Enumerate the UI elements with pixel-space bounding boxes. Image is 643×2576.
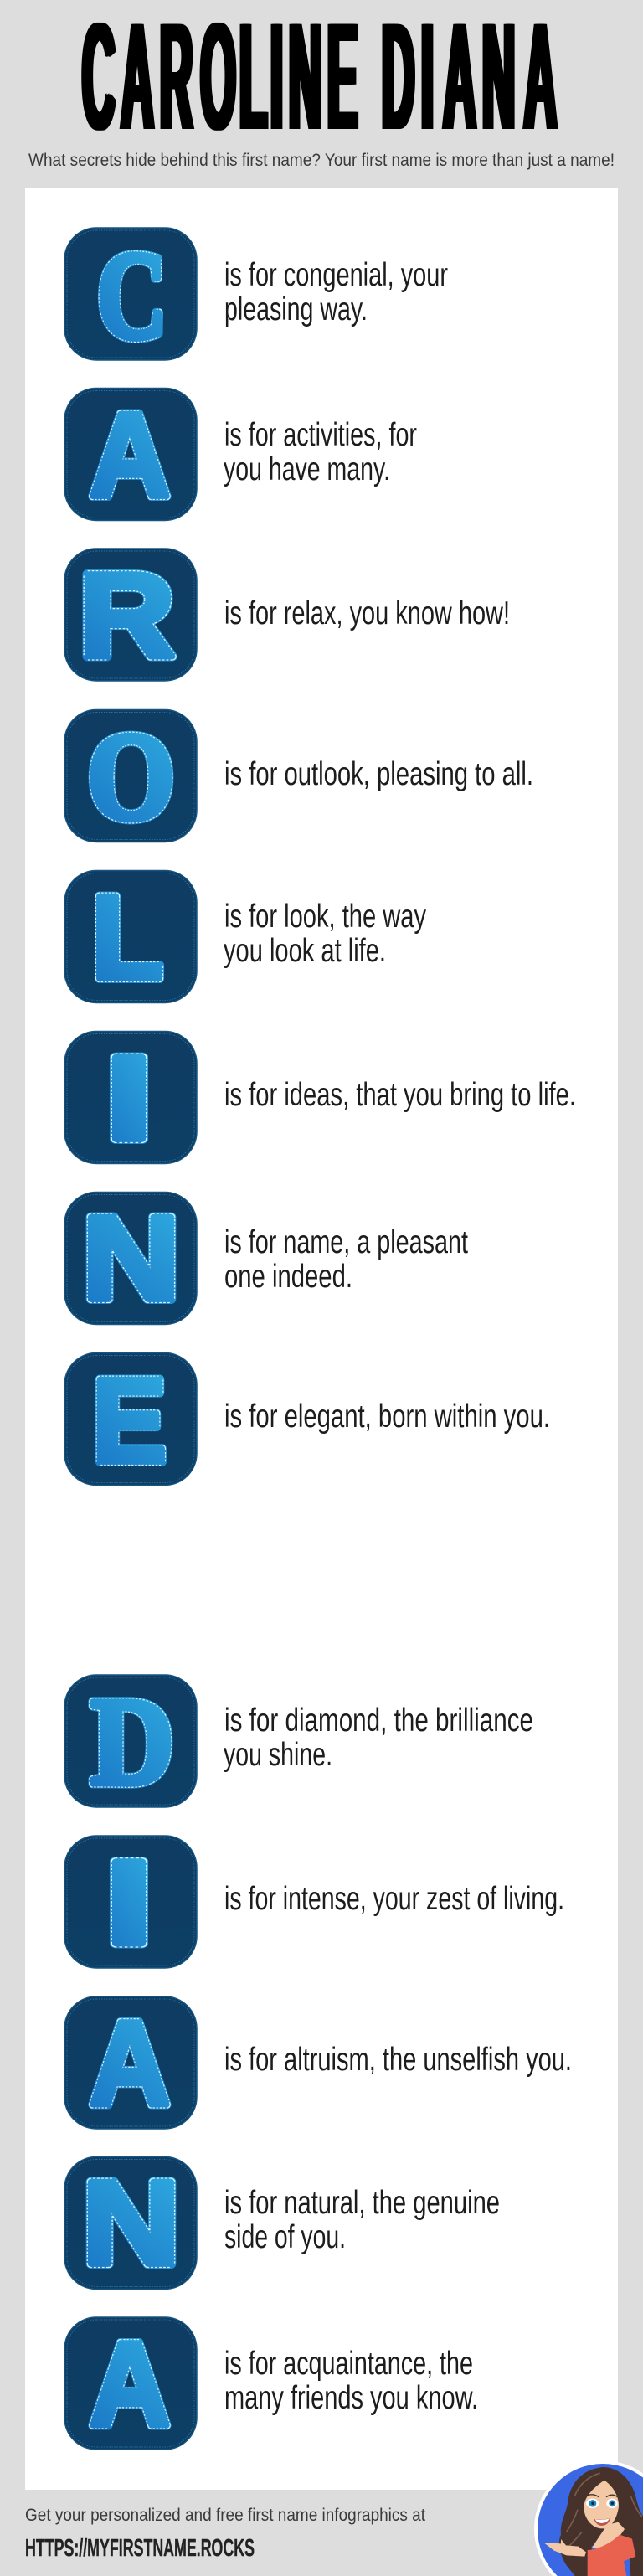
- row: O: [64, 707, 533, 846]
- row: A: many friends you know.: [224, 2380, 478, 2416]
- row: I: [64, 1836, 564, 1970]
- row: D: D: [90, 1672, 174, 1811]
- row: D: D: [90, 1672, 174, 1811]
- row: O: O: [87, 707, 175, 846]
- row: A: is for acquaintance, the: [224, 2346, 473, 2382]
- row: L: L: [91, 871, 163, 1005]
- footer text: Get your personalized and free first name infographics at: [25, 2506, 425, 2525]
- row: I: I: [105, 1837, 153, 1970]
- row: A: A: [90, 389, 170, 523]
- row: N: one indeed.: [224, 1259, 352, 1295]
- row: O: is for outlook, pleasing to all.: [224, 756, 533, 792]
- row: A: A: [90, 2318, 170, 2451]
- row: A: [64, 389, 417, 523]
- row: A: A: [90, 389, 170, 523]
- row: I: I: [105, 1032, 153, 1166]
- row: A: A: [90, 2318, 170, 2451]
- row: E: [64, 1353, 550, 1487]
- row: C: C: [97, 226, 167, 365]
- row: A: [64, 1996, 572, 2130]
- row: N: N: [82, 1193, 180, 1325]
- icon: avatar woman: [534, 2460, 643, 2576]
- row: N: [64, 1193, 468, 1325]
- row: N: N: [82, 2157, 180, 2290]
- row: I: I: [105, 1032, 153, 1166]
- row: A: is for activities, for: [224, 417, 417, 453]
- row: N: N: [82, 2157, 180, 2290]
- row: R: is for relax, you know how!: [224, 595, 510, 631]
- row: R: R: [79, 549, 175, 683]
- row: L: L: [91, 871, 163, 1005]
- row: C: C: [97, 226, 167, 365]
- row: A: A: [90, 1997, 170, 2130]
- row: O: O: [87, 707, 175, 846]
- row: I: I: [105, 1837, 153, 1970]
- row: L: [64, 871, 426, 1005]
- row: A: A: [90, 389, 170, 523]
- footer url: HTTPS://MYFIRSTNAME.ROCKS: [25, 2535, 255, 2562]
- row: D: D: [90, 1672, 174, 1811]
- row: N: N: [82, 1193, 180, 1325]
- row: E: E: [92, 1355, 167, 1487]
- row: D: [64, 1672, 533, 1811]
- row: N: N: [82, 2157, 180, 2290]
- row: D: is for diamond, the brilliance: [224, 1703, 533, 1739]
- row: N: is for name, a pleasant: [224, 1224, 468, 1260]
- row: C: C: [97, 226, 167, 365]
- row: E: E: [92, 1355, 167, 1487]
- row: R: [64, 549, 510, 683]
- row: N: [64, 2157, 500, 2290]
- row: E: E: [92, 1355, 167, 1487]
- row: A: A: [90, 1997, 170, 2130]
- row: D: you shine.: [224, 1737, 332, 1773]
- row: A: you have many.: [224, 451, 390, 487]
- row: I: I: [105, 1837, 153, 1970]
- row: I: I: [105, 1032, 153, 1166]
- row: C: pleasing way.: [224, 291, 368, 327]
- row: N: is for natural, the genuine: [224, 2185, 500, 2221]
- row: N: side of you.: [224, 2219, 346, 2255]
- row: N: N: [82, 1193, 180, 1325]
- row: O: O: [87, 707, 175, 846]
- row: I: [64, 1032, 576, 1166]
- row: A: A: [90, 2318, 170, 2451]
- row: C: [64, 226, 448, 365]
- row: L: you look at life.: [224, 933, 386, 969]
- row: R: R: [79, 549, 175, 683]
- row: R: R: [79, 549, 175, 683]
- row: L: L: [91, 871, 163, 1005]
- row: C: is for congenial, your: [224, 257, 448, 293]
- row: A: A: [90, 1997, 170, 2130]
- row: L: is for look, the way: [224, 899, 426, 935]
- row: A: [64, 2317, 478, 2451]
